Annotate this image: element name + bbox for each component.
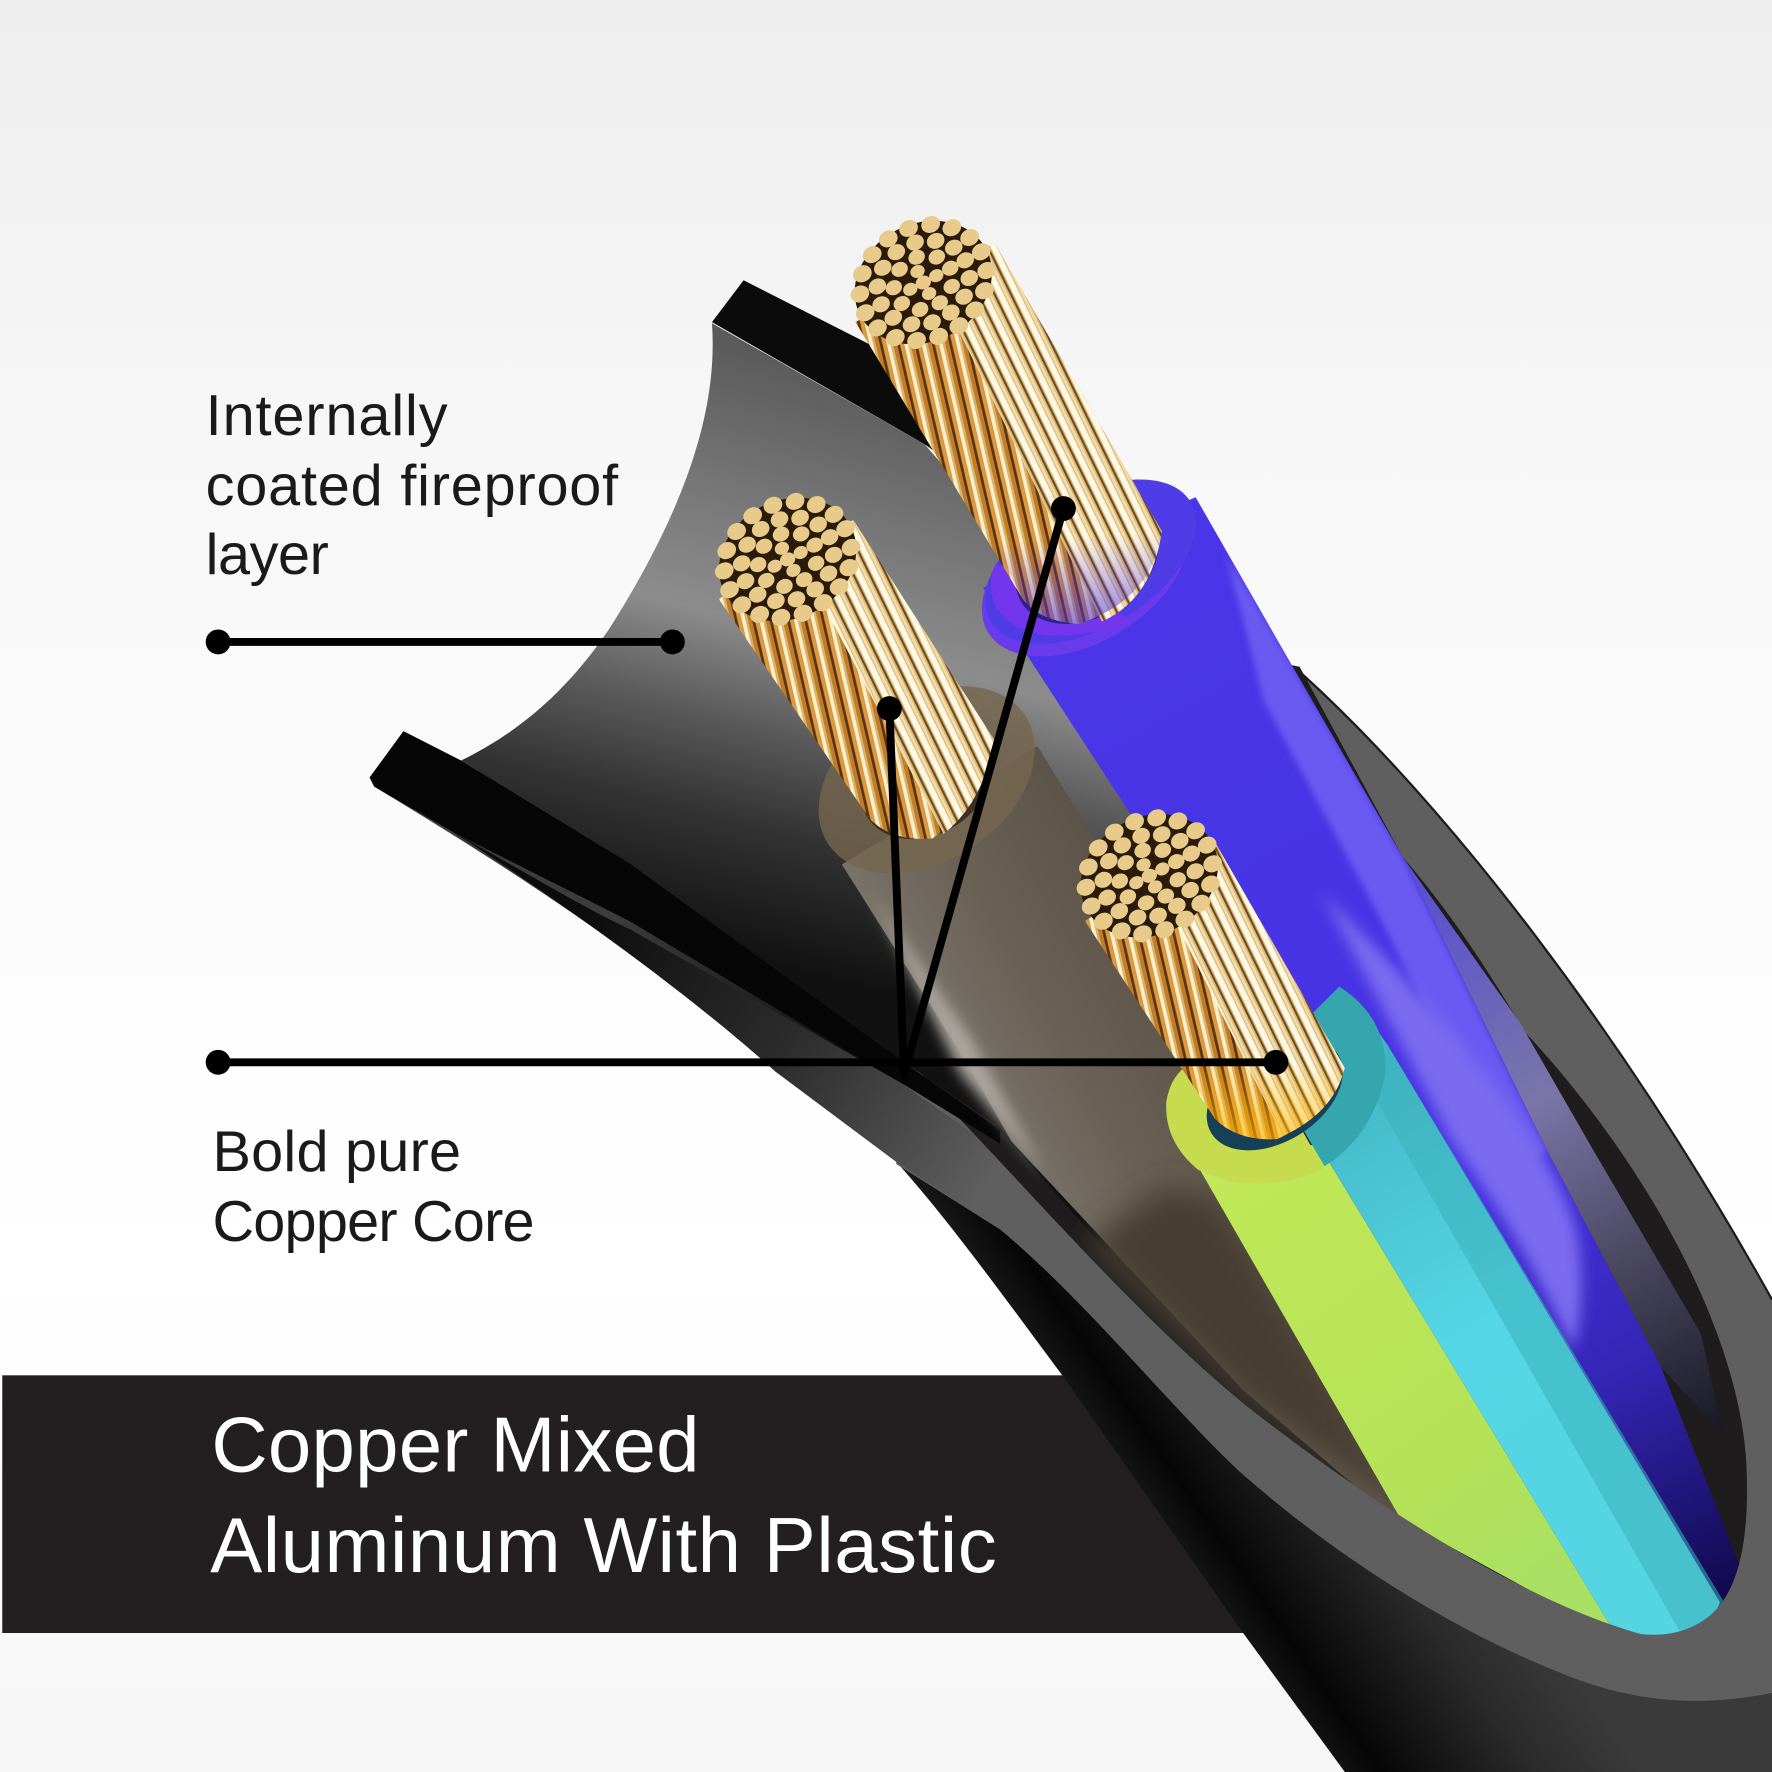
band title bbox=[210, 1400, 997, 1589]
label: fireproof layer: Internally bbox=[206, 384, 448, 448]
internal cavity bbox=[921, 633, 1747, 1635]
green and cyan wire bodies bbox=[1200, 1033, 1723, 1635]
left copper wire bbox=[697, 474, 994, 839]
label: copper core: Copper Core bbox=[212, 1190, 535, 1254]
purple wire body bbox=[983, 497, 1746, 1627]
band title: Copper Mixed bbox=[211, 1400, 700, 1488]
jacket lower stripe bbox=[451, 831, 1000, 1230]
band title: Aluminum With Plastic bbox=[210, 1501, 997, 1589]
purple insulation end bbox=[953, 446, 1224, 690]
brown insulation end bbox=[784, 648, 1070, 912]
leader dots bbox=[206, 496, 1288, 1085]
purple wire highlight bbox=[1322, 893, 1581, 1350]
label: fireproof layer: coated fireproof bbox=[206, 454, 619, 518]
brown wire lower shade bbox=[1084, 1178, 1396, 1510]
purple wire light areas bbox=[1226, 554, 1581, 1350]
cable interior wires bbox=[842, 497, 1746, 1627]
lower copper wire bbox=[1059, 791, 1345, 1139]
top copper wire bbox=[833, 197, 1162, 624]
label: copper core: Bold pure bbox=[212, 1120, 461, 1184]
fireproof inner layer sheet bbox=[461, 323, 1401, 1492]
purple wire light edge bbox=[1226, 554, 1547, 1175]
opening rim bbox=[896, 667, 1772, 1701]
brown wire light stripe bbox=[872, 895, 1045, 1175]
bottom title band bbox=[2, 1375, 1257, 1633]
inner grey sliver bbox=[1402, 857, 1723, 1435]
label: fireproof layer: layer bbox=[206, 523, 329, 587]
cable outer jacket bbox=[374, 667, 1772, 1772]
rim outer outline bbox=[1294, 667, 1772, 1300]
brown wire body bbox=[842, 746, 1401, 1526]
label: copper core bbox=[212, 1120, 535, 1254]
sheet lower rim bbox=[370, 731, 1000, 1144]
sheet top rim bbox=[712, 280, 944, 458]
label: fireproof layer bbox=[206, 384, 619, 587]
leader lines bbox=[218, 509, 1276, 1074]
green and cyan insulation end bbox=[1166, 987, 1386, 1184]
